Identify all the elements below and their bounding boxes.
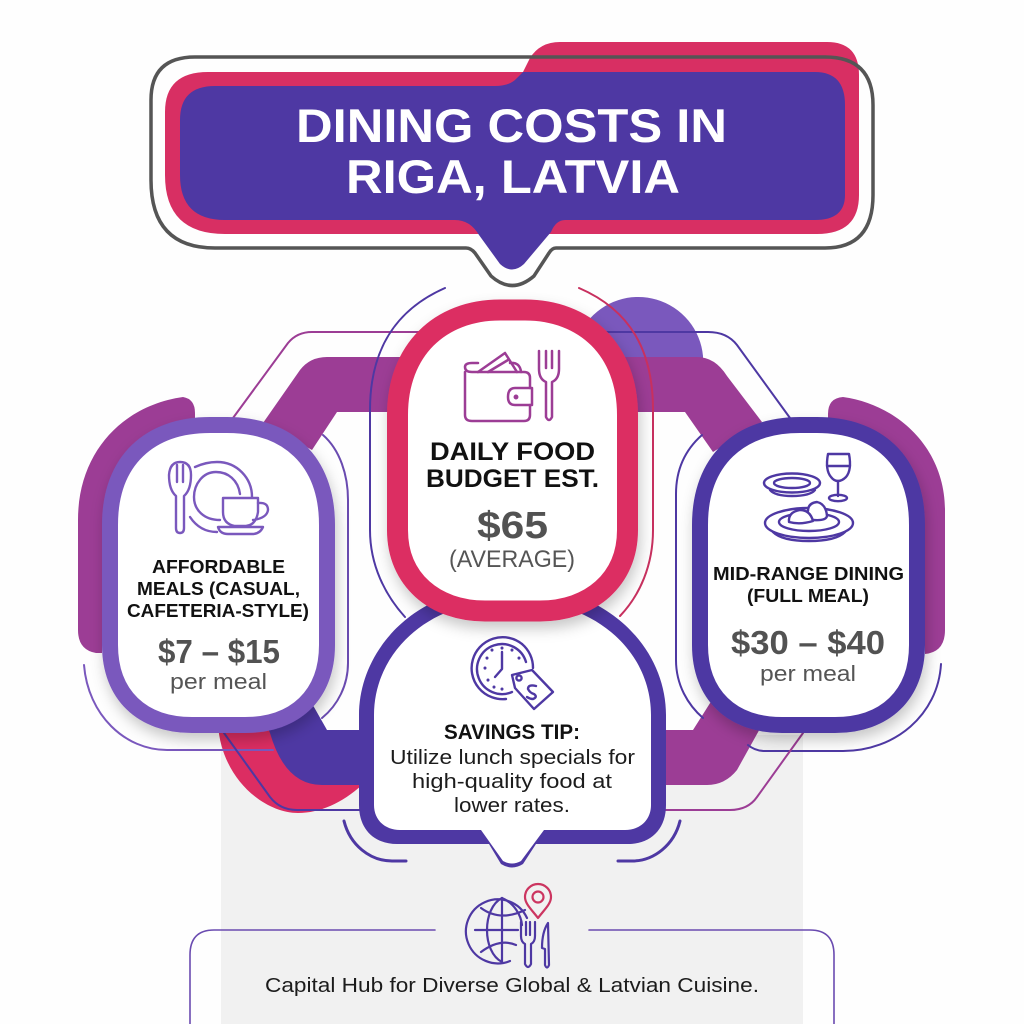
budget heading: BUDGET EST.: [426, 465, 599, 493]
mid-range unit: per meal: [760, 661, 856, 686]
icon: globe with pin and cutlery: [466, 884, 551, 968]
panel: footer: [190, 884, 834, 1024]
affordable heading: [127, 556, 309, 621]
decorative thin lines: [84, 288, 941, 810]
background panel: grey column: [221, 735, 803, 1024]
banner purple layer: [180, 72, 845, 270]
icon: wallet and fork: [465, 351, 559, 421]
connector: bottom right magenta band: [650, 700, 762, 785]
panel: affordable meals: [110, 425, 327, 725]
savings body text: [390, 746, 635, 817]
savings heading: SAVINGS TIP:: [444, 721, 580, 744]
connector: bottom left purple band: [262, 700, 365, 785]
budget heading: DAILY FOOD: [430, 438, 595, 466]
banner red layer: [165, 42, 859, 234]
footer frame: [190, 930, 834, 1024]
mid-range heading: (FULL MEAL): [747, 585, 869, 606]
savings card interior: [374, 600, 651, 864]
title: [296, 99, 727, 203]
banner outline: [151, 57, 873, 286]
mid-range price: $30 – $40: [731, 624, 885, 661]
savings body text: high-quality food at: [412, 770, 612, 793]
panel: daily food budget: [398, 310, 628, 611]
icon: clock and price tag: [472, 637, 553, 709]
title: DINING COSTS IN: [296, 99, 727, 152]
affordable card frame: [110, 425, 327, 725]
budget card frame: [398, 310, 628, 611]
mid-range heading: [713, 563, 904, 606]
budget heading: [426, 438, 599, 493]
connector: red blob bottom left: [218, 725, 362, 813]
affordable unit: per meal: [170, 669, 267, 694]
budget note: (AVERAGE): [449, 546, 575, 573]
panel: title banner: [151, 42, 873, 286]
panel: savings tip: [359, 585, 666, 868]
savings body text: Utilize lunch specials for: [390, 746, 635, 769]
panel: mid-range dining: [700, 425, 917, 725]
affordable heading: MEALS (CASUAL,: [137, 578, 300, 599]
affordable price: $7 – $15: [158, 633, 280, 670]
icon: plates and wine glass: [764, 454, 853, 541]
affordable heading: AFFORDABLE: [152, 556, 285, 577]
icon: spoon, plate and cup: [169, 462, 268, 534]
savings card frame: [359, 585, 666, 868]
footer text: Capital Hub for Diverse Global & Latvian Cuisine.: [265, 974, 759, 997]
connector: right magenta blob: [828, 397, 945, 654]
budget value: $65: [477, 505, 548, 547]
connector: purple circle top right: [587, 297, 703, 370]
title: RIGA, LATVIA: [346, 150, 680, 203]
mid-range card frame: [700, 425, 917, 725]
affordable heading: CAFETERIA-STYLE): [127, 600, 309, 621]
connector: left magenta blob: [78, 397, 195, 653]
connector: top magenta band: [263, 357, 762, 452]
mid-range heading: MID-RANGE DINING: [713, 563, 904, 584]
savings body text: lower rates.: [454, 794, 570, 817]
decorative arcs beside savings tail: [344, 821, 680, 861]
